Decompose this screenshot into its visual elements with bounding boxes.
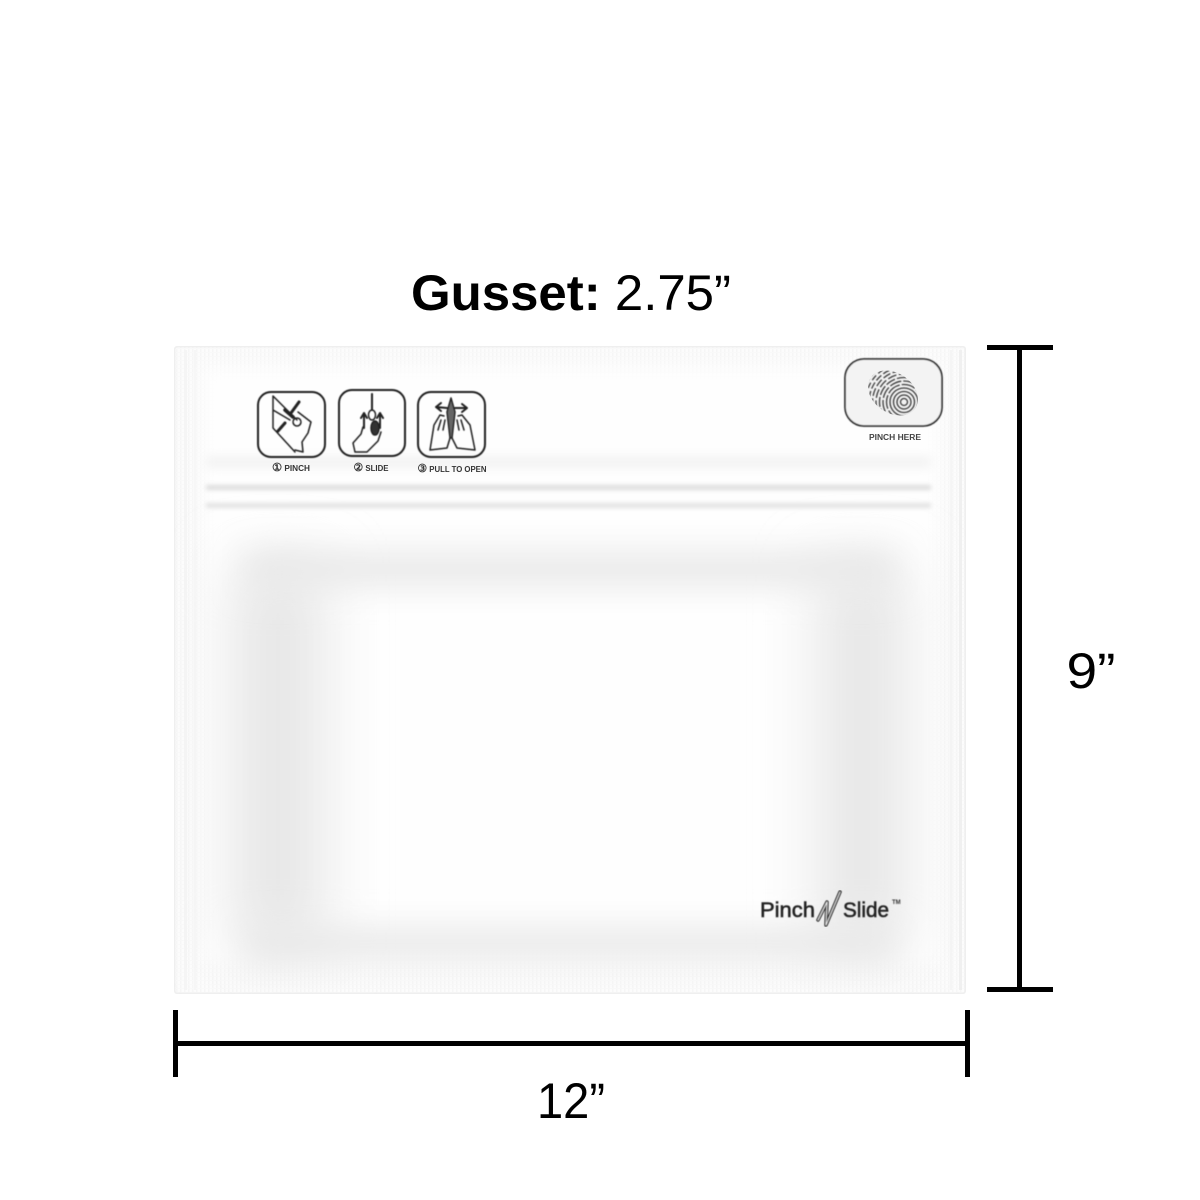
- bag side seal lines: [959, 350, 962, 990]
- height dimension bracket: [987, 345, 1053, 992]
- instruction label: pinch: ① PINCH: [272, 462, 310, 474]
- instruction icon: slide: [339, 390, 405, 456]
- button outline: [845, 359, 942, 426]
- pouch bag: [174, 346, 966, 994]
- heading: gusset size: Gusset: 2.75”: [411, 265, 731, 321]
- bag inner panel: [204, 368, 938, 962]
- bag interior shade: top: [245, 552, 895, 586]
- logo text: Pinch: Pinch: [760, 899, 815, 922]
- logo mark: N: [818, 892, 840, 925]
- width label: 12”: [537, 1073, 605, 1129]
- bag ribbed seal edge: [174, 346, 966, 994]
- bag interior shade: left: [232, 565, 324, 950]
- instruction label: slide: ② SLIDE: [354, 462, 389, 474]
- logo text: Slide: Slide: [843, 899, 889, 922]
- instruction icon: pull to open: [418, 392, 485, 457]
- zipper band: [206, 456, 931, 508]
- instruction label: pull to open: ③ PULL TO OPEN: [418, 463, 487, 475]
- height label: 9”: [1066, 643, 1116, 699]
- brand logo: [760, 892, 901, 925]
- icon: fingerprint: [868, 370, 918, 416]
- pinch here button: [843, 357, 944, 440]
- label: pinch here: PINCH HERE: [869, 433, 922, 442]
- width dimension bracket: [173, 1010, 970, 1077]
- instruction icon: pinch: [258, 392, 325, 457]
- bag interior shade: bottom: [245, 928, 895, 960]
- bag outer edge: [174, 346, 966, 994]
- bag interior shade: right: [818, 565, 906, 950]
- logo trademark: TM: [892, 900, 901, 906]
